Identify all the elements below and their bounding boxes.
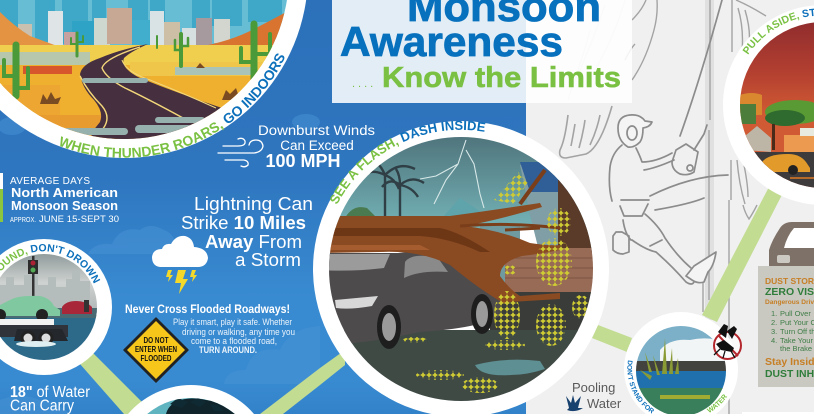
lightning text: Strike 10 Miles [181,213,306,233]
dust storm truck icon [769,222,814,266]
cacti [4,24,270,96]
dust storm panel [758,266,814,387]
lightning text: Lightning Can [194,194,313,214]
puddles [63,78,205,135]
do not enter sign: FLOODED [140,354,172,363]
wind icon [218,138,263,167]
pooling water text: Pooling [572,380,615,395]
caption: don't stand: DON'T STAND FOR [627,360,654,414]
lightning text: a Storm [235,250,301,270]
climbing figure line art [609,0,728,284]
dust storm panel: 4. [771,336,777,345]
dust storm panel: Take Your [780,336,813,345]
caption: see a flash: SEE A FLASH, DASH INSIDE [330,120,486,204]
leaf clusters [403,172,590,393]
helmet [618,115,652,147]
pooling water text [572,380,622,411]
downburst text: 100 MPH [265,151,341,171]
dust storm panel: 3. [771,327,777,336]
lightning [420,140,484,208]
rope [650,0,728,210]
do not enter sign: ENTER WHEN [135,345,177,354]
brick wall [505,248,600,294]
subtitle: Know the Limits: .... [352,78,376,90]
dust storm panel: DUST INH [765,369,814,380]
torso and arm [609,145,674,201]
dust storm panel: DUST STOR [765,276,814,286]
hills [0,12,54,45]
subtitle: Know the Limits: Know the Limits [382,62,621,94]
average days block [0,173,119,225]
flooded roadway body text: TURN AROUND. [199,345,257,355]
harness and bag [613,200,649,254]
icon: water splash [566,395,583,411]
do not enter sign: DO NOT [144,336,169,345]
18 inches of water text [10,384,90,414]
lightning text [181,194,313,270]
average days block: APPROX. [10,217,36,224]
dust storm panel: Dangerous Driv [765,299,814,306]
icon: no mosquito [714,324,741,359]
road [80,44,221,139]
circle: bottom tree scene [128,385,254,414]
icon: storm cloud with lightning [152,236,208,294]
circle: standing water [624,312,738,414]
circle: turn around don't drown [0,239,112,375]
downburst text: Can Exceed [280,138,354,153]
tree trunk and branches [320,203,560,304]
average days block: AVERAGE DAYS [10,176,90,187]
do not enter sign [124,318,188,382]
circle: see a flash dash inside [313,120,609,414]
dust storm panel: Pull Over [780,309,811,318]
circle: pull aside stay alive [723,6,814,204]
bottom right white card edge [742,412,814,414]
boot [686,252,716,283]
house [520,165,592,255]
lightning text: Away From [205,232,302,252]
car [320,252,500,345]
green connector bands [80,185,787,414]
downburst text: Downburst Winds [258,123,375,138]
faint branches behind title area [568,0,625,100]
dust storm panel: 1. [771,309,777,318]
dust storm panel: Stay Insid [765,356,814,368]
pooling water text: Water [587,396,622,411]
flooded roadway body text [173,317,295,355]
blue panel background [0,0,526,414]
legs [632,214,694,284]
average days block: Monsoon Season [11,198,118,213]
circle: when thunder roars [0,0,306,158]
dust storm panel: 2. [771,318,777,327]
title: Awareness: Awareness [340,18,563,65]
dust storm panel: ZERO VIS [765,286,814,298]
caption: when thunder roars: WHEN THUNDER ROARS, GO INDOORS [60,54,284,158]
line art: tree limbs and pole [560,0,766,414]
ground [344,330,578,401]
flooded roadway body text: come to a flooded road, [191,336,277,346]
average days block: JUNE 15-SEPT 30 [39,214,119,225]
flooded roadway body text: driving or walking, any time you [182,327,295,337]
background clouds [0,114,320,414]
flooded roadway heading: Never Cross Flooded Roadways! [125,304,290,316]
palms [370,164,424,216]
dust storm panel: the Brake [780,344,812,353]
title panel [332,0,632,103]
saw [672,125,707,175]
downburst text [258,123,375,171]
18 inches of water text: 18" of Water [10,384,90,401]
average days block: North American [11,185,118,200]
18 inches of water text: Can Carry [10,398,74,414]
flooded roadway body text: Play it smart, play it safe. Whether [173,317,292,327]
